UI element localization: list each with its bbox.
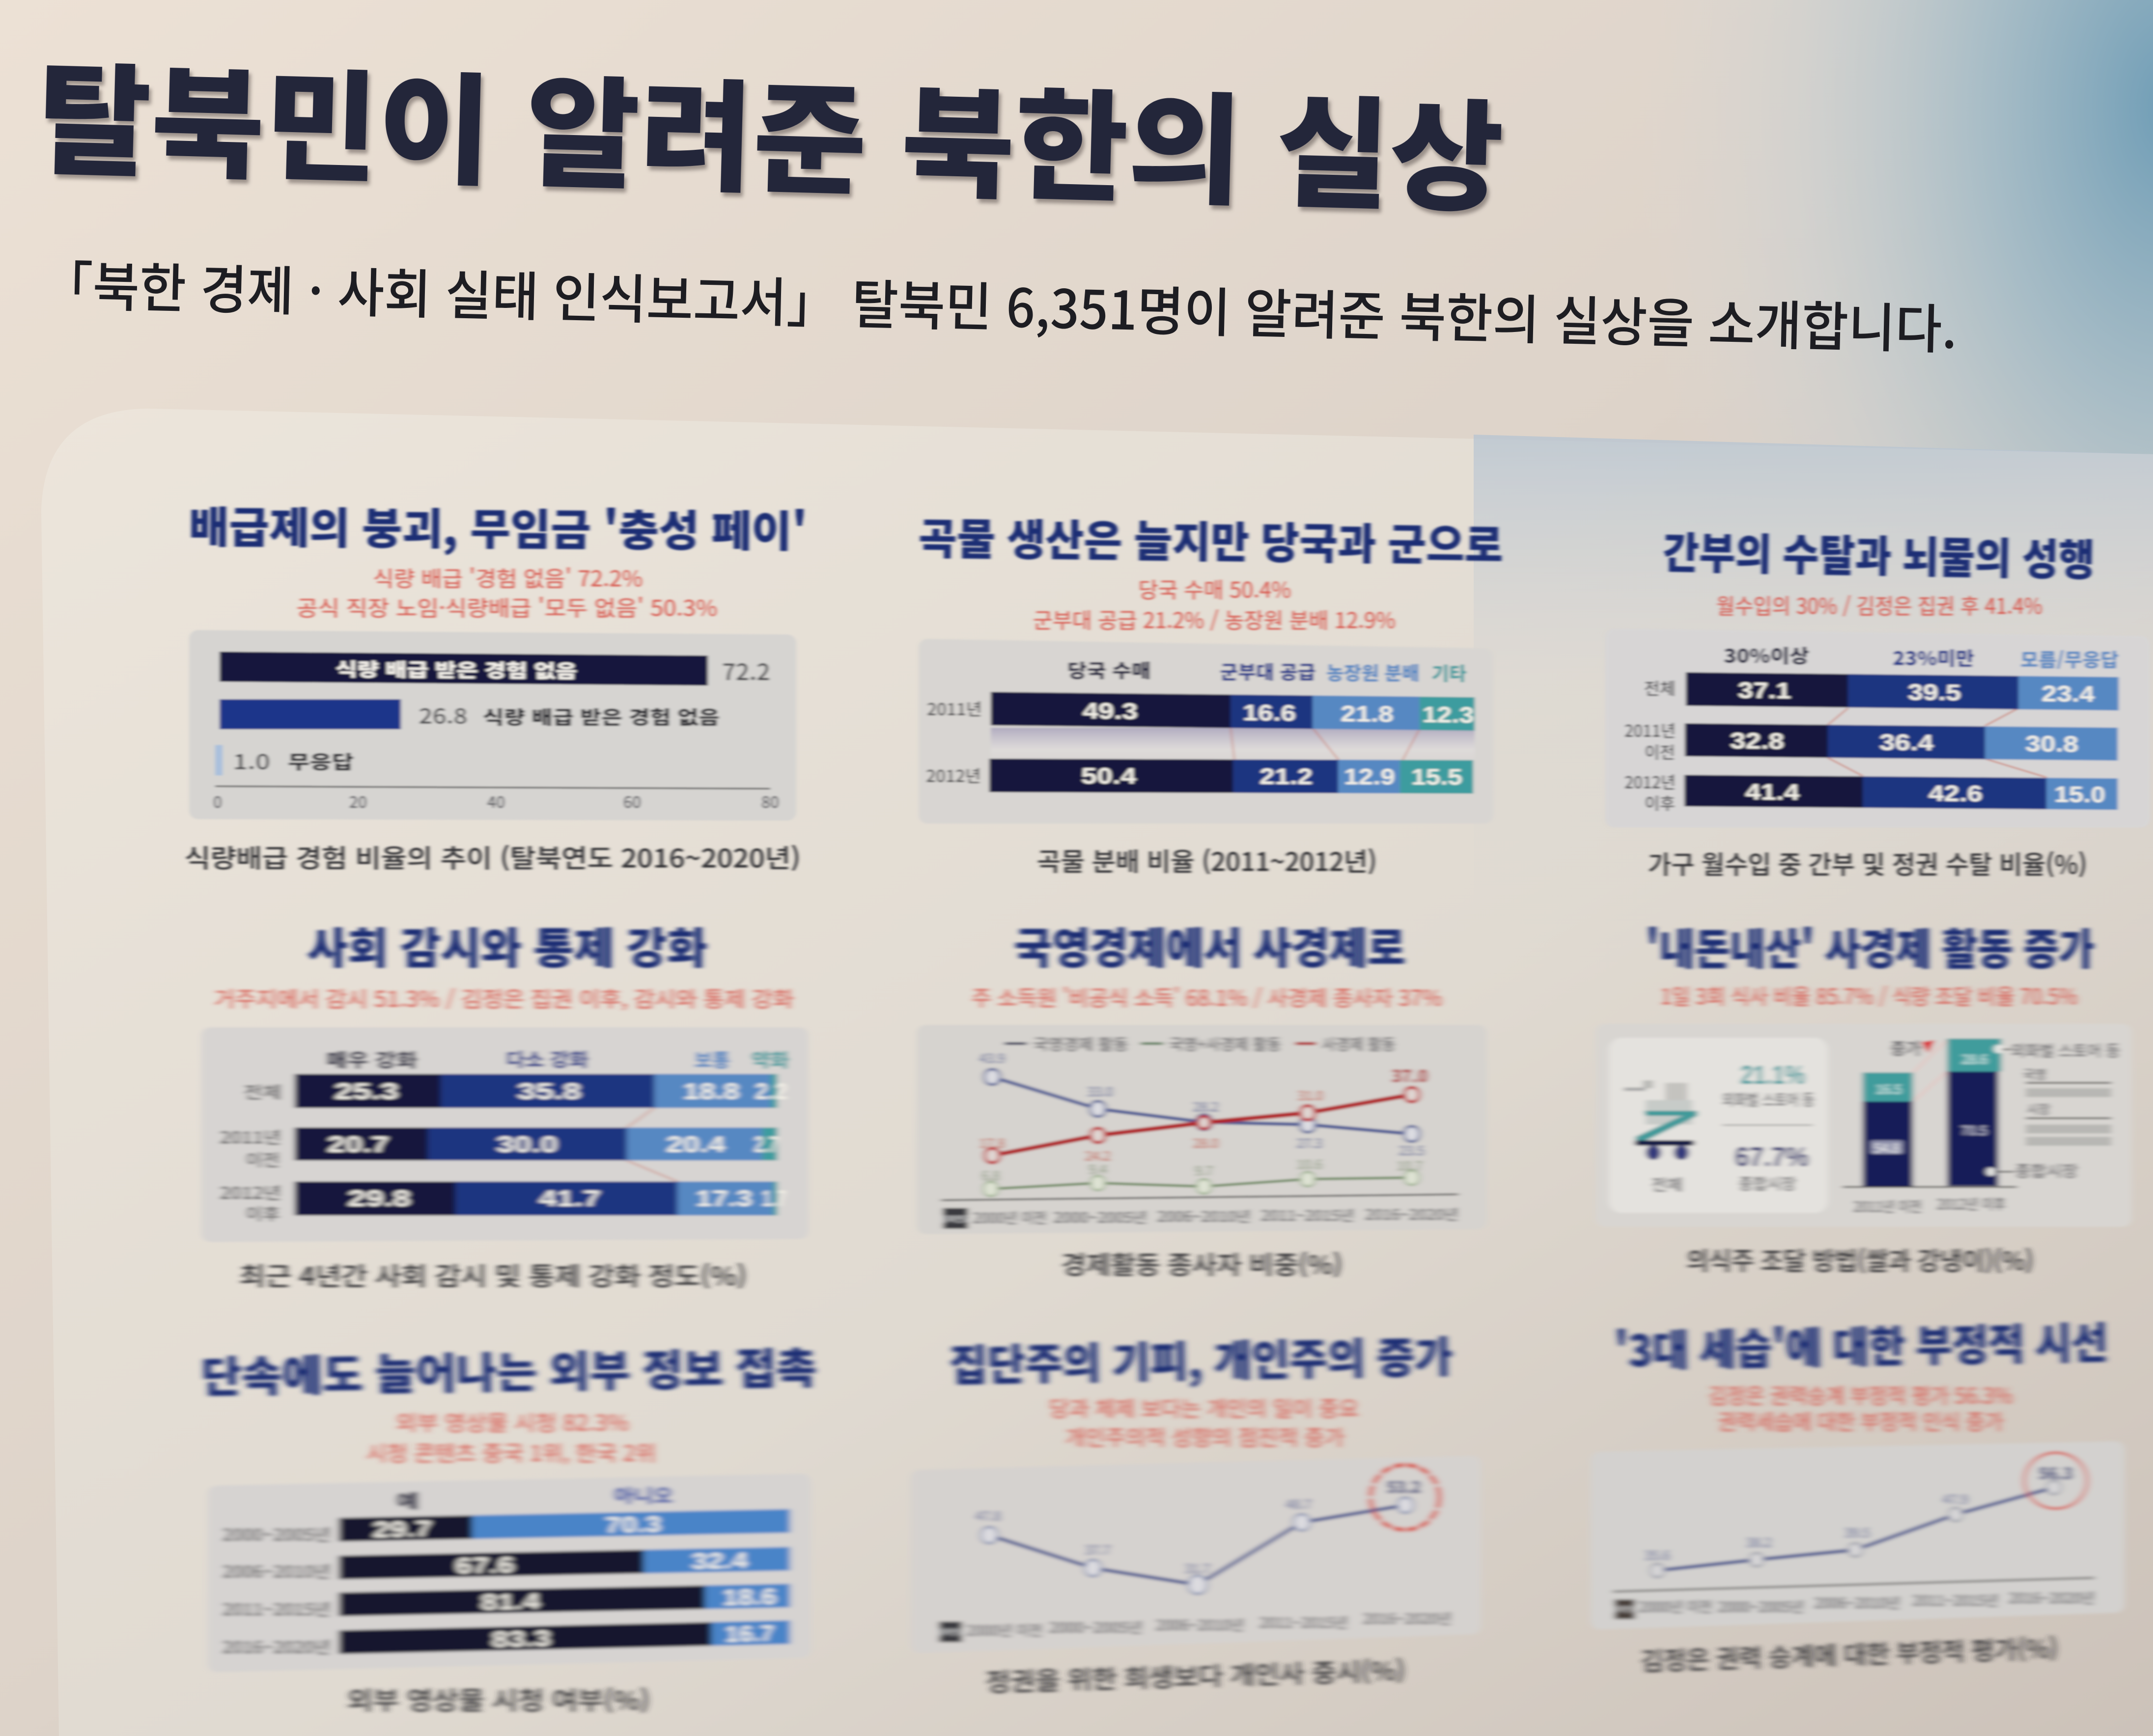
stacked bar card: 36.4 bbox=[1879, 729, 1934, 755]
stacked bar card: 29.7 bbox=[373, 1516, 432, 1543]
x axis labels: 2011~2015년 bbox=[1259, 1611, 1348, 1632]
bar chart card: 식량 배급 받은 경험 없음 bbox=[336, 654, 577, 683]
mixed economy line bbox=[981, 1155, 1423, 1196]
stacked bar card: 41.7 bbox=[539, 1185, 600, 1211]
bar chart card: 40 bbox=[487, 790, 505, 813]
stacked bar card: 15.5 bbox=[1411, 764, 1462, 790]
stacked bar card: 23%미만 bbox=[1893, 643, 1974, 671]
stacked bar card: 16.7 bbox=[725, 1620, 774, 1647]
column 2012 and later bbox=[1937, 1039, 2006, 1214]
caption: 가구 월수입 중 간부 및 정권 수탈 비율(%) bbox=[1648, 845, 2087, 881]
stacked bar card: 보통 bbox=[695, 1045, 730, 1073]
stacked bar card bbox=[210, 1036, 800, 1233]
data labels bbox=[976, 1475, 1421, 1577]
data labels: 47.9 bbox=[1943, 1490, 1968, 1508]
caption: 식량배급 경험 비율의 추이 (탈북연도 2016~2020년) bbox=[185, 838, 801, 875]
stacked bar card: 30.0 bbox=[496, 1131, 558, 1157]
stacked bar card: 32.8 bbox=[1730, 728, 1784, 754]
caption: 외부 영상물 시청 여부(%) bbox=[347, 1681, 650, 1717]
column 2012 and later: 70.5 bbox=[1961, 1121, 1987, 1139]
content backdrop panel bbox=[41, 409, 2153, 1736]
bar chart card: 20 bbox=[349, 790, 367, 813]
bar chart card: 1.0 bbox=[233, 745, 270, 776]
private economy line bbox=[979, 1063, 1428, 1165]
private economy line: 28.0 bbox=[1193, 1133, 1219, 1152]
stacked bar card: 2.2 bbox=[755, 1078, 787, 1104]
stat: 21.1%: 외화벌 스토어 등 bbox=[1722, 1088, 1815, 1110]
data labels: 48.7 bbox=[1286, 1495, 1312, 1513]
data labels: 56.3 bbox=[2039, 1461, 2073, 1484]
stacked bar card: 81.4 bbox=[481, 1588, 540, 1615]
stacked bar card: 이전 bbox=[246, 1147, 280, 1171]
panel: state to private economy bbox=[925, 914, 1478, 1282]
key finding: 1일 3회 식사 비율 85.7% / 식량 조달 비율 70.5% bbox=[1660, 979, 2078, 1011]
inner summary card bbox=[1609, 1038, 1828, 1213]
callouts and notes: 시장 bbox=[2027, 1100, 2050, 1118]
chart card bbox=[1605, 1033, 2123, 1218]
line series bbox=[989, 1505, 1405, 1585]
data labels bbox=[1645, 1461, 2073, 1564]
stacked bar card: 37.1 bbox=[1738, 677, 1791, 703]
data points bbox=[1650, 1481, 2061, 1577]
x axis labels: 탈북연도 bbox=[1612, 1604, 1637, 1614]
stacked bar card: 12.9 bbox=[1344, 764, 1395, 789]
x axis labels: 2000~2005년 bbox=[1054, 1206, 1147, 1227]
callouts and notes: 외화벌 스토어 등 bbox=[2011, 1039, 2120, 1061]
caption: 경제활동 종사자 비중(%) bbox=[1062, 1244, 1342, 1282]
caption: 최근 4년간 사회 감시 및 통제 강화 정도(%) bbox=[240, 1256, 747, 1293]
x axis labels: 2000년 이전 bbox=[1639, 1595, 1712, 1617]
panel: outside information access bbox=[201, 1334, 817, 1717]
stacked bar card: 이후 bbox=[246, 1201, 280, 1225]
heading: 집단주의 기피, 개인주의 증가 bbox=[949, 1323, 1453, 1394]
highlight ring bbox=[1370, 1465, 1439, 1530]
key findings bbox=[297, 561, 717, 622]
bar chart card: 60 bbox=[623, 790, 641, 813]
key findings: 공식 직장 노임·식량배급 '모두 없음' 50.3% bbox=[297, 591, 717, 622]
stacked bar card: 다소 강화 bbox=[506, 1045, 588, 1072]
mixed economy line: 9.4 bbox=[1089, 1160, 1107, 1178]
stacked bar card: 매우 강화 bbox=[326, 1045, 418, 1073]
stacked bar card: 당국 수매 bbox=[1067, 656, 1151, 683]
stacked bar card: 67.6 bbox=[455, 1552, 514, 1578]
stacked bar card: 83.3 bbox=[492, 1625, 551, 1652]
stacked bar card: 2.7 bbox=[754, 1131, 779, 1157]
key findings bbox=[1033, 573, 1396, 634]
state economy line: 23.5 bbox=[1399, 1141, 1425, 1159]
panel: private economic activity bbox=[1605, 915, 2123, 1278]
state economy line: 43.9 bbox=[979, 1049, 1005, 1067]
key findings: 김정은 권력승계 부정적 평가 56.3% bbox=[1708, 1378, 2013, 1410]
stat: 67.7%: 종합시장 bbox=[1739, 1172, 1796, 1194]
data labels: 31.7 bbox=[1185, 1559, 1210, 1577]
panel: cadre extortion bbox=[1614, 519, 2141, 881]
stacked bar card: 이전 bbox=[1645, 740, 1675, 763]
line series bbox=[1657, 1488, 2054, 1571]
stacked bar card: 전체 bbox=[244, 1079, 282, 1103]
state economy line: 27.3 bbox=[1297, 1133, 1322, 1152]
stat: 21.1% bbox=[1722, 1060, 1815, 1110]
x axis labels bbox=[941, 1203, 1458, 1229]
mixed economy line: 9.7 bbox=[1195, 1161, 1213, 1180]
stacked bar card: 32.4 bbox=[692, 1547, 748, 1574]
key findings: 권력세습에 대한 부정적 인식 증가 bbox=[1718, 1405, 2003, 1436]
stacked bar card: 예 bbox=[396, 1486, 419, 1514]
column 2011 and earlier: 2011년 이전 bbox=[1854, 1195, 1922, 1216]
state economy line bbox=[979, 1049, 1425, 1159]
line chart card bbox=[925, 1032, 1478, 1229]
legend bbox=[1005, 1032, 1396, 1055]
caption: 정권을 위한 희생보다 개인사 중시(%) bbox=[985, 1651, 1406, 1699]
key findings: 시청 콘텐츠 중국 1위, 한국 2위 bbox=[366, 1436, 656, 1467]
highlight ring bbox=[2024, 1453, 2087, 1509]
data labels: 38.2 bbox=[1746, 1533, 1772, 1551]
panel: hereditary succession views bbox=[1599, 1309, 2116, 1678]
stacked bar card: 30%이상 bbox=[1724, 641, 1809, 668]
key findings: 당국 수매 50.4% bbox=[1139, 573, 1291, 604]
stacked bar card: 2012년 bbox=[220, 1180, 281, 1204]
stacked bar card: 모름/무응답 bbox=[2020, 645, 2119, 672]
stacked bar card: 21.2 bbox=[1259, 764, 1313, 789]
column 2011 and earlier bbox=[1854, 1073, 1922, 1216]
x axis labels: 2006~2010년 bbox=[1157, 1205, 1251, 1226]
private economy line: 31.0 bbox=[1298, 1086, 1323, 1104]
heading: 배급제의 붕괴, 무임금 '충성 페이' bbox=[189, 493, 808, 560]
key finding: 월수입의 30% / 김정은 집권 후 41.4% bbox=[1716, 589, 2042, 620]
heading: 단속에도 늘어나는 외부 정보 접촉 bbox=[201, 1334, 817, 1405]
key findings bbox=[1708, 1378, 2013, 1436]
stacked bar card: 23.4 bbox=[2041, 681, 2095, 707]
x axis labels bbox=[937, 1607, 1452, 1642]
bar chart card: 무응답 bbox=[288, 747, 354, 774]
callouts and notes: 국영 bbox=[2023, 1065, 2046, 1083]
bar chart card: 72.2 bbox=[722, 655, 770, 687]
stacked bar card: 42.6 bbox=[1929, 780, 1983, 806]
stat: 67.7% bbox=[1651, 1141, 1809, 1195]
stacked bar card: 2000~2005년 bbox=[223, 1521, 331, 1546]
panel: food ration collapse bbox=[185, 493, 808, 875]
stacked bar card: 70.3 bbox=[605, 1511, 661, 1538]
data labels: 35.6 bbox=[1645, 1546, 1670, 1564]
stacked bar card: 약화 bbox=[752, 1045, 789, 1073]
column 2011 and earlier: 54.8 bbox=[1874, 1138, 1900, 1157]
stacked bar card bbox=[926, 648, 1484, 815]
column 2012 and later: 2012년 이후 bbox=[1937, 1192, 2006, 1214]
increase marker: 증가 bbox=[1891, 1035, 1921, 1060]
heading: '3대 세습'에 대한 부정적 시선 bbox=[1614, 1309, 2108, 1379]
stacked bar card: 39.5 bbox=[1908, 679, 1961, 705]
data labels: 37.7 bbox=[1085, 1540, 1111, 1559]
bar chart card: 80 bbox=[761, 790, 779, 813]
callouts and notes: 종합시장 bbox=[2015, 1159, 2078, 1182]
stacked bar card: 12.3 bbox=[1423, 702, 1474, 728]
x axis labels: 2016~2020년 bbox=[1363, 1607, 1452, 1628]
x axis labels bbox=[1612, 1586, 2095, 1619]
stacked bar card: 49.3 bbox=[1083, 698, 1138, 724]
x axis labels: 2006~2010년 bbox=[1156, 1613, 1244, 1635]
stacked bar card: 전체 bbox=[1644, 676, 1676, 699]
data labels: 53.2 bbox=[1387, 1475, 1421, 1498]
column 2012 and later: 28.6 bbox=[1962, 1050, 1987, 1068]
line chart card bbox=[920, 1464, 1472, 1644]
key findings: 외부 영상물 시청 82.3% bbox=[396, 1405, 629, 1437]
mixed economy line: 10.7 bbox=[1397, 1156, 1423, 1175]
x axis labels: 2011~2015년 bbox=[1261, 1204, 1354, 1225]
stacked bar card: 아니오 bbox=[614, 1481, 673, 1508]
stacked bar card: 2011년 bbox=[1624, 718, 1676, 742]
stacked bar card: 2016~2020년 bbox=[223, 1634, 331, 1658]
heading: '내돈내산' 사경제 활동 증가 bbox=[1646, 915, 2095, 977]
key findings bbox=[1049, 1391, 1359, 1452]
mixed economy line: 6.8 bbox=[981, 1166, 1000, 1185]
stacked bar card: 15.0 bbox=[2054, 781, 2105, 807]
stacked bar card: 17.3 bbox=[696, 1185, 753, 1211]
private economy line: 24.2 bbox=[1085, 1146, 1111, 1165]
stacked bar card: 2011년 bbox=[927, 696, 982, 720]
bar chart card bbox=[198, 639, 787, 813]
key finding: 거주지에서 감시 51.3% / 김정은 집권 이후, 감시와 통제 강화 bbox=[214, 982, 794, 1013]
x axis labels: 2006~2010년 bbox=[1815, 1591, 1900, 1613]
key finding: 주 소득원 '비공식 소득' 68.1% / 사경제 종사자 37% bbox=[972, 981, 1442, 1012]
key findings: 군부대 공급 21.2% / 농장원 분배 12.9% bbox=[1033, 603, 1396, 634]
key findings: 식량 배급 '경험 없음' 72.2% bbox=[373, 561, 643, 593]
bar chart card: 식량 배급 받은 경험 없음 bbox=[483, 702, 720, 730]
stacked bar card: 2011~2015년 bbox=[223, 1596, 331, 1621]
stacked bar card: 이후 bbox=[1645, 791, 1675, 814]
caption: 김정은 권력 승계에 대한 부정적 평가(%) bbox=[1641, 1628, 2058, 1678]
arrows between bars bbox=[1913, 1040, 1947, 1102]
stacked bar card bbox=[217, 1481, 802, 1663]
x axis labels: 2000년 이전 bbox=[973, 1206, 1047, 1228]
line chart card bbox=[1599, 1450, 2116, 1621]
key findings: 개인주의적 성향의 점진적 증가 bbox=[1065, 1420, 1344, 1452]
legend: 국영+사경제 활동 bbox=[1169, 1032, 1281, 1055]
state economy line: 33.0 bbox=[1088, 1082, 1113, 1100]
stacked bar card: 16.6 bbox=[1243, 700, 1296, 726]
legend: 국영경제 활동 bbox=[1033, 1032, 1128, 1055]
legend: 사경제 활동 bbox=[1322, 1032, 1396, 1055]
data points bbox=[981, 1497, 1413, 1594]
bar chart card: 26.8 bbox=[419, 700, 468, 730]
stacked bar card: 20.4 bbox=[666, 1131, 726, 1157]
x axis labels: 2000~2005년 bbox=[1049, 1616, 1143, 1637]
private economy line: 37.0 bbox=[1392, 1063, 1428, 1087]
state economy line: 28.2 bbox=[1193, 1097, 1219, 1116]
x axis labels: 탈북연도 bbox=[937, 1626, 964, 1637]
key findings bbox=[366, 1405, 656, 1467]
private economy line: 17.8 bbox=[979, 1133, 1005, 1152]
mixed economy line: 10.6 bbox=[1297, 1155, 1322, 1173]
stacked bar card: 25.3 bbox=[335, 1078, 398, 1104]
panel: rising individualism bbox=[920, 1323, 1472, 1699]
panel: grain distribution bbox=[918, 504, 1504, 878]
stat: 21.1%: 21.1% bbox=[1740, 1060, 1805, 1090]
x axis labels: 2011~2015년 bbox=[1913, 1589, 1998, 1610]
stacked bar card: 30.8 bbox=[2025, 731, 2078, 757]
heading: 국영경제에서 사경제로 bbox=[1014, 914, 1405, 976]
stacked bar card: 18.6 bbox=[723, 1584, 777, 1610]
icon: shopping cart bbox=[1624, 1080, 1697, 1160]
stacked bar card: 18.8 bbox=[683, 1078, 740, 1104]
data labels: 39.5 bbox=[1845, 1523, 1870, 1541]
stacked bar card: 군부대 공급 bbox=[1220, 657, 1315, 685]
caption: 의식주 조달 방법(쌀과 강냉이)(%) bbox=[1687, 1240, 2034, 1278]
stacked bar card: 2006~2010년 bbox=[223, 1559, 331, 1582]
callouts and notes bbox=[1986, 1039, 2120, 1182]
stat: 67.7%: 전체 bbox=[1651, 1173, 1683, 1195]
stacked bar card: 35.8 bbox=[517, 1078, 581, 1104]
subtitle: 「북한 경제 · 사회 실태 인식보고서」 탈북민 6,351명이 알려준 북한의 실상을 소개합니다. bbox=[41, 244, 1958, 364]
stacked bar card: 농장원 분배 bbox=[1326, 658, 1420, 686]
stacked bar card: 20.7 bbox=[327, 1131, 389, 1157]
heading: 곡물 생산은 늘지만 당국과 군으로 bbox=[918, 504, 1504, 574]
x axis labels: 2016~2020년 bbox=[2009, 1586, 2095, 1608]
column 2011 and earlier: 16.5 bbox=[1876, 1079, 1901, 1098]
data labels: 47.8 bbox=[976, 1507, 1001, 1524]
heading: 사회 감시와 통제 강화 bbox=[308, 914, 707, 976]
stacked bar card: 1.7 bbox=[762, 1185, 786, 1211]
stat: 67.7%: 67.7% bbox=[1735, 1141, 1809, 1172]
x axis labels: 2016~2020년 bbox=[1365, 1203, 1458, 1224]
stacked bar card: 2011년 bbox=[220, 1125, 281, 1148]
x axis labels: 2000년 이전 bbox=[967, 1619, 1042, 1640]
stacked bar card bbox=[1614, 637, 2141, 819]
panel: social surveillance bbox=[210, 914, 800, 1293]
bar chart card: 0 bbox=[213, 790, 222, 813]
heading: 간부의 수탈과 뇌물의 성행 bbox=[1662, 519, 2096, 588]
x axis labels: 2000~2005년 bbox=[1718, 1595, 1804, 1617]
key findings: 당과 체제 보다는 개인의 일이 중요 bbox=[1049, 1391, 1359, 1423]
stacked bar card: 2012년 bbox=[1624, 769, 1676, 794]
stacked bar card: 50.4 bbox=[1081, 763, 1137, 789]
stacked bar card: 21.8 bbox=[1341, 701, 1394, 727]
main title: 탈북민이 알려준 북한의 실상 bbox=[35, 23, 1506, 236]
stacked bar card: 29.8 bbox=[348, 1185, 411, 1211]
stacked bar card: 2012년 bbox=[926, 763, 981, 787]
x axis labels: 탈북연도 bbox=[941, 1212, 970, 1224]
caption: 곡물 분배 비율 (2011~2012년) bbox=[1037, 842, 1377, 878]
stacked bar card: 기타 bbox=[1431, 659, 1467, 686]
stacked bar card: 41.4 bbox=[1745, 779, 1800, 805]
